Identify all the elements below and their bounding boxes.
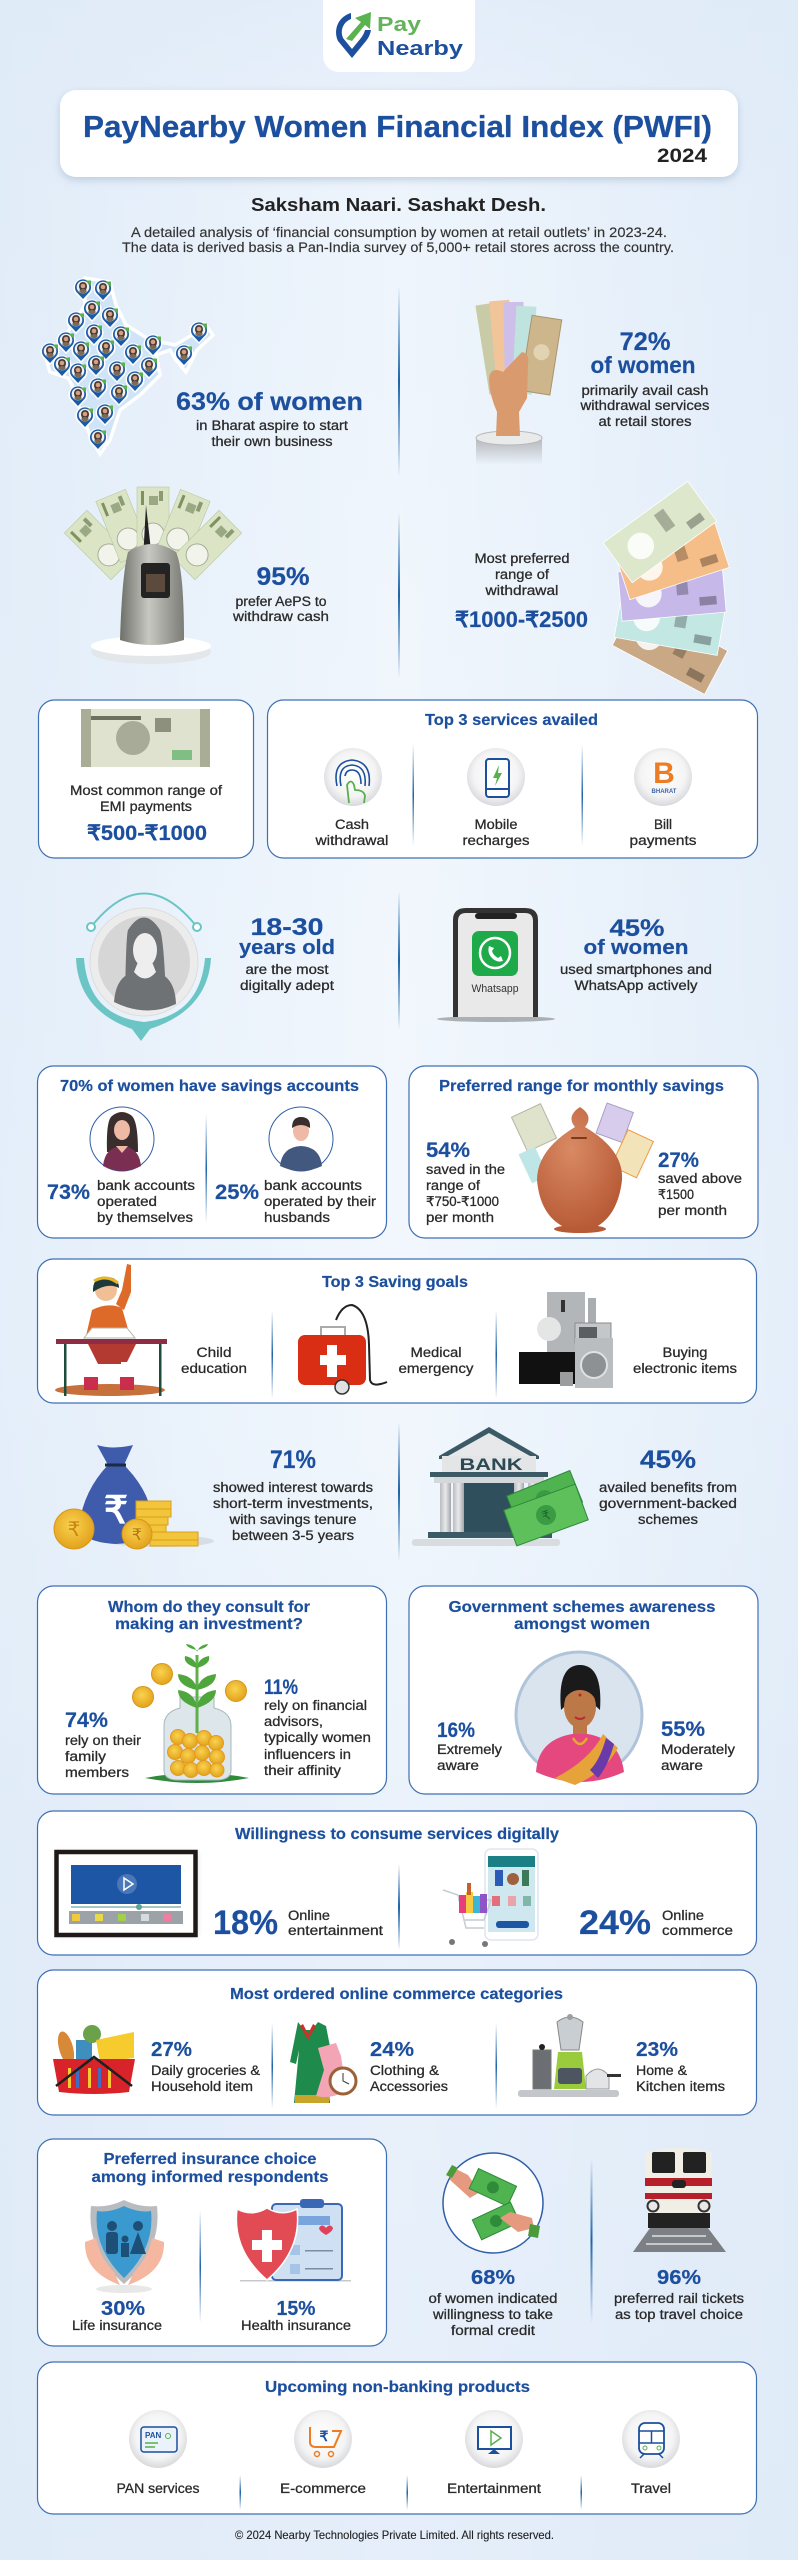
logo wordmark: Pay xyxy=(377,14,422,36)
panel: upcoming non-banking products xyxy=(38,2362,756,2514)
caption: Household item xyxy=(151,2079,253,2094)
caption xyxy=(636,2063,725,2094)
caption: short-term investments, xyxy=(213,1496,373,1511)
icon: PayNearby pin xyxy=(336,12,371,58)
icon: man avatar xyxy=(269,1107,333,1171)
panel: willingness to consume digitally xyxy=(38,1811,756,1955)
label: PAN services xyxy=(116,2481,200,2496)
icon: Bharat BillPay xyxy=(634,748,692,806)
intro text: A detailed analysis of ‘financial consumption by women at retail outlets’ in 2023-24. xyxy=(131,225,667,240)
caption: Online xyxy=(662,1908,704,1923)
caption: Health insurance xyxy=(241,2318,351,2333)
icon: money bag and coins: ₹ xyxy=(68,1519,80,1541)
number: 68% xyxy=(471,2266,515,2289)
title: PayNearby Women Financial Index (PWFI) xyxy=(83,110,712,144)
footer: © 2024 Nearby Technologies Private Limited. All rights reserved. xyxy=(235,2528,554,2542)
icon: PAN card: PAN xyxy=(145,2431,162,2440)
panel: saving goals xyxy=(38,1259,756,1403)
caption xyxy=(560,962,712,993)
caption: per month xyxy=(426,1210,494,1225)
sub-number: years old xyxy=(239,936,335,959)
heading: Willingness to consume services digitally xyxy=(235,1826,559,1843)
icon: dress and clock xyxy=(290,2022,356,2103)
caption xyxy=(437,1742,502,1773)
caption: availed benefits from xyxy=(599,1480,737,1495)
caption: used smartphones and xyxy=(560,962,712,977)
icon: child at desk xyxy=(55,1264,167,1396)
caption xyxy=(658,1171,742,1218)
caption: aware xyxy=(437,1758,479,1773)
icon: grocery basket xyxy=(53,2025,135,2094)
label: Mobile xyxy=(474,817,518,832)
caption: Moderately xyxy=(661,1742,735,1757)
caption: bank accounts xyxy=(97,1178,195,1193)
caption xyxy=(288,1908,383,1938)
label xyxy=(633,1345,737,1376)
icon: Bharat BillPay: BHARAT xyxy=(652,789,677,795)
label: Medical xyxy=(410,1345,462,1360)
caption: primarily avail cash xyxy=(582,383,708,398)
icon: family shield in hands xyxy=(85,2200,164,2293)
stat: 11% xyxy=(264,1676,298,1699)
caption: their affinity xyxy=(264,1763,341,1778)
app label: Whatsapp xyxy=(472,983,518,995)
icon: bank building with cash xyxy=(412,1427,588,1546)
heading: Government schemes awareness xyxy=(448,1599,716,1616)
caption: range of xyxy=(426,1178,480,1193)
label: E-commerce xyxy=(280,2481,366,2496)
label: Bill xyxy=(654,817,672,832)
label: emergency xyxy=(398,1361,474,1376)
caption xyxy=(264,1698,371,1778)
icon: PAN card xyxy=(129,2410,187,2468)
caption: saved in the xyxy=(426,1162,505,1177)
caption: Extremely xyxy=(437,1742,502,1757)
caption: operated xyxy=(97,1194,157,1209)
icon: shopping phone and cart xyxy=(443,1849,538,1947)
number: 63% of women xyxy=(176,388,363,416)
icon: e-commerce cart: ₹ xyxy=(320,2428,329,2444)
icon: India map with pins xyxy=(40,278,213,454)
label: education xyxy=(181,1361,247,1376)
bank sign: BANK xyxy=(460,1456,523,1474)
stat: 96% rail tickets xyxy=(614,2148,744,2322)
icon: bank building with cash: ₹ xyxy=(540,1507,553,1524)
label xyxy=(462,817,530,848)
label xyxy=(630,817,697,848)
caption: WhatsApp actively xyxy=(574,978,698,993)
icon: health shield and clipboard xyxy=(236,2199,351,2282)
stat: 30% xyxy=(101,2297,145,2320)
caption: EMI payments xyxy=(100,799,192,814)
icon: 500 rupee note xyxy=(81,709,210,767)
caption xyxy=(196,418,348,449)
caption: withdrawal xyxy=(484,583,558,598)
logo wordmark: Nearby xyxy=(377,38,464,60)
stat: withdrawal range xyxy=(455,481,729,694)
sub-number: of women xyxy=(590,352,696,378)
caption: members xyxy=(65,1765,129,1780)
heading: Whom do they consult for xyxy=(108,1599,310,1616)
caption: family xyxy=(65,1749,106,1764)
stat: 45% WhatsApp xyxy=(437,908,712,1022)
label xyxy=(398,1345,474,1376)
label xyxy=(181,1345,247,1376)
icon: plant in coin jar xyxy=(132,1644,249,1783)
number: 45% xyxy=(610,915,664,942)
heading: 70% of women have savings accounts xyxy=(60,1078,359,1095)
number: 18-30 xyxy=(250,914,324,941)
heading: Upcoming non-banking products xyxy=(265,2379,530,2396)
stat: 71% short-term xyxy=(54,1445,373,1549)
caption: their own business xyxy=(212,434,333,449)
caption: influencers in xyxy=(264,1747,351,1762)
caption: entertainment xyxy=(288,1923,383,1938)
icon: hands exchanging cash xyxy=(443,2153,543,2253)
icon: mobile recharge xyxy=(467,748,525,806)
icon: money bag and coins xyxy=(54,1445,214,1549)
logo card xyxy=(323,0,475,72)
stat: 18-30 years xyxy=(76,894,335,1041)
stat: 72% of women xyxy=(475,300,710,465)
caption: by themselves xyxy=(97,1210,193,1225)
number: 45% xyxy=(640,1446,696,1474)
caption: preferred rail tickets xyxy=(614,2291,744,2306)
heading xyxy=(92,2151,328,2186)
icon: woman portrait in teal badge xyxy=(76,894,211,1041)
amount: ₹1000-₹2500 xyxy=(455,607,588,632)
stat: 73% xyxy=(47,1181,90,1204)
icon: home appliances xyxy=(519,1292,613,1388)
title card xyxy=(60,90,738,177)
caption: of women indicated xyxy=(428,2291,558,2306)
caption: digitally adept xyxy=(240,978,334,993)
caption: aware xyxy=(661,1758,703,1773)
caption: Kitchen items xyxy=(636,2079,725,2094)
caption: showed interest towards xyxy=(213,1480,373,1495)
caption: schemes xyxy=(638,1512,698,1527)
icon: woman in saree xyxy=(516,1652,642,1785)
caption: rely on their xyxy=(65,1733,142,1748)
caption: Daily groceries & xyxy=(151,2063,260,2078)
caption: range of xyxy=(495,567,549,582)
caption: saved above xyxy=(658,1171,742,1186)
icon: notes fan xyxy=(603,481,729,694)
intro text: The data is derived basis a Pan-India survey of 5,000+ retail stores across the country. xyxy=(122,240,674,255)
label: Child xyxy=(196,1345,232,1360)
caption xyxy=(97,1178,195,1225)
caption xyxy=(151,2063,260,2094)
caption xyxy=(599,1480,737,1527)
label: Cash xyxy=(335,817,369,832)
stat: 27% xyxy=(658,1149,699,1172)
stat: 68% formal credit xyxy=(428,2153,558,2338)
label xyxy=(314,817,388,848)
icon: train locomotive xyxy=(633,2148,726,2252)
caption: advisors, xyxy=(264,1714,323,1729)
icon: kitchen appliances xyxy=(518,2014,621,2097)
heading xyxy=(448,1599,716,1633)
sub-number: of women xyxy=(584,936,688,959)
caption: Accessories xyxy=(370,2079,448,2094)
icon: fingerprint xyxy=(324,748,382,806)
caption: husbands xyxy=(264,1210,330,1225)
panel: top 3 services xyxy=(268,700,758,858)
label: withdrawal xyxy=(314,833,388,848)
icon: train xyxy=(622,2410,680,2468)
heading: making an investment? xyxy=(115,1616,303,1633)
caption: withdrawal services xyxy=(579,398,710,413)
caption: Life insurance xyxy=(72,2318,162,2333)
caption: rely on financial xyxy=(264,1698,367,1713)
icon: money bag and coins: ₹ xyxy=(104,1490,128,1532)
icon: e-commerce cart xyxy=(294,2410,352,2468)
panel: insurance choice xyxy=(38,2139,386,2346)
caption: Home & xyxy=(636,2063,687,2078)
heading xyxy=(108,1599,310,1633)
caption: Most preferred xyxy=(474,551,570,566)
caption xyxy=(426,1162,505,1225)
stat: 25% xyxy=(215,1181,259,1204)
stat: 54% xyxy=(426,1139,470,1162)
caption: prefer AePS to xyxy=(236,594,326,609)
stat: 16% xyxy=(437,1719,475,1742)
caption xyxy=(232,594,329,624)
icon: medical kit and stethoscope xyxy=(298,1305,387,1394)
caption: bank accounts xyxy=(264,1178,362,1193)
caption: Clothing & xyxy=(370,2063,439,2078)
caption: ₹750-₹1000 xyxy=(426,1194,499,1209)
icon: money bag and coins: ₹ xyxy=(132,1527,142,1544)
caption: ₹1500 xyxy=(658,1187,694,1202)
stat: 74% xyxy=(65,1709,108,1732)
number: 71% xyxy=(270,1446,316,1474)
heading: Top 3 services availed xyxy=(425,712,598,729)
number: 95% xyxy=(256,563,310,591)
tagline: Saksham Naari. Sashakt Desh. xyxy=(251,195,546,215)
icon: screen with video player xyxy=(56,1852,198,1936)
panel: monthly savings xyxy=(409,1066,758,1238)
stat: 63% of women xyxy=(40,278,363,454)
stat: 15% xyxy=(276,2297,316,2320)
number: 96% xyxy=(657,2266,701,2289)
caption xyxy=(428,2291,558,2338)
stat: 18% xyxy=(213,1904,278,1942)
caption: government-backed xyxy=(599,1496,737,1511)
caption: typically women xyxy=(264,1730,371,1745)
caption xyxy=(661,1742,735,1773)
caption: as top travel choice xyxy=(615,2307,743,2322)
panel: savings accounts xyxy=(38,1066,386,1238)
caption: are the most xyxy=(246,962,329,977)
caption: per month xyxy=(658,1203,727,1218)
caption: operated by their xyxy=(264,1194,377,1209)
caption: withdraw cash xyxy=(232,609,329,624)
icon: hand holding notes on stand xyxy=(475,300,562,465)
heading: amongst women xyxy=(514,1616,650,1633)
heading: among informed respondents xyxy=(92,2169,328,2186)
stat: 95% AePS xyxy=(64,487,329,664)
icon: Bharat BillPay: B xyxy=(653,757,675,790)
number: 72% xyxy=(620,328,670,356)
caption: at retail stores xyxy=(598,414,692,429)
icon: fingerprint scanner with note fan xyxy=(64,487,242,664)
year: 2024 xyxy=(657,146,707,167)
caption xyxy=(370,2063,448,2094)
caption xyxy=(65,1733,142,1780)
stat: 24% xyxy=(370,2038,414,2061)
caption: willingness to take xyxy=(432,2307,553,2322)
stat: 27% xyxy=(151,2038,192,2061)
icon: phone with WhatsApp xyxy=(437,908,555,1022)
stat: 24% xyxy=(579,1904,651,1942)
amount: ₹500-₹1000 xyxy=(87,822,207,845)
heading: Preferred insurance choice xyxy=(104,2151,317,2168)
label: payments xyxy=(630,833,697,848)
caption xyxy=(474,551,570,598)
caption xyxy=(662,1908,733,1938)
caption xyxy=(70,783,222,814)
caption xyxy=(240,962,334,993)
caption xyxy=(614,2291,744,2322)
panel: EMI payments xyxy=(38,700,254,858)
caption: formal credit xyxy=(451,2323,535,2338)
label: Buying xyxy=(662,1345,708,1360)
label: recharges xyxy=(462,833,530,848)
stat: 45% government schemes xyxy=(412,1427,737,1546)
caption: between 3-5 years xyxy=(232,1528,354,1543)
caption: with savings tenure xyxy=(228,1512,356,1527)
label: Travel xyxy=(631,2481,671,2496)
logo wordmark xyxy=(377,14,464,60)
panel: government schemes awareness xyxy=(409,1586,758,1794)
panel: online commerce categories xyxy=(38,1970,756,2115)
caption xyxy=(264,1178,377,1225)
icon: clay piggy pot with notes xyxy=(512,1103,653,1233)
label: electronic items xyxy=(633,1361,737,1376)
stat: 55% xyxy=(661,1718,705,1741)
intro text xyxy=(122,225,674,255)
heading: Top 3 Saving goals xyxy=(322,1274,468,1291)
caption xyxy=(579,383,710,429)
icon: woman avatar xyxy=(90,1107,154,1171)
caption: in Bharat aspire to start xyxy=(196,418,348,433)
heading: Most ordered online commerce categories xyxy=(230,1986,563,2003)
caption: commerce xyxy=(662,1923,733,1938)
icon: entertainment screen xyxy=(465,2410,523,2468)
heading: Preferred range for monthly savings xyxy=(439,1078,724,1095)
caption: Most common range of xyxy=(70,783,222,798)
panel: investment consult xyxy=(38,1586,386,1794)
caption: Online xyxy=(288,1908,330,1923)
caption xyxy=(213,1480,373,1543)
label: Entertainment xyxy=(447,2481,541,2496)
stat: 23% xyxy=(636,2038,678,2061)
